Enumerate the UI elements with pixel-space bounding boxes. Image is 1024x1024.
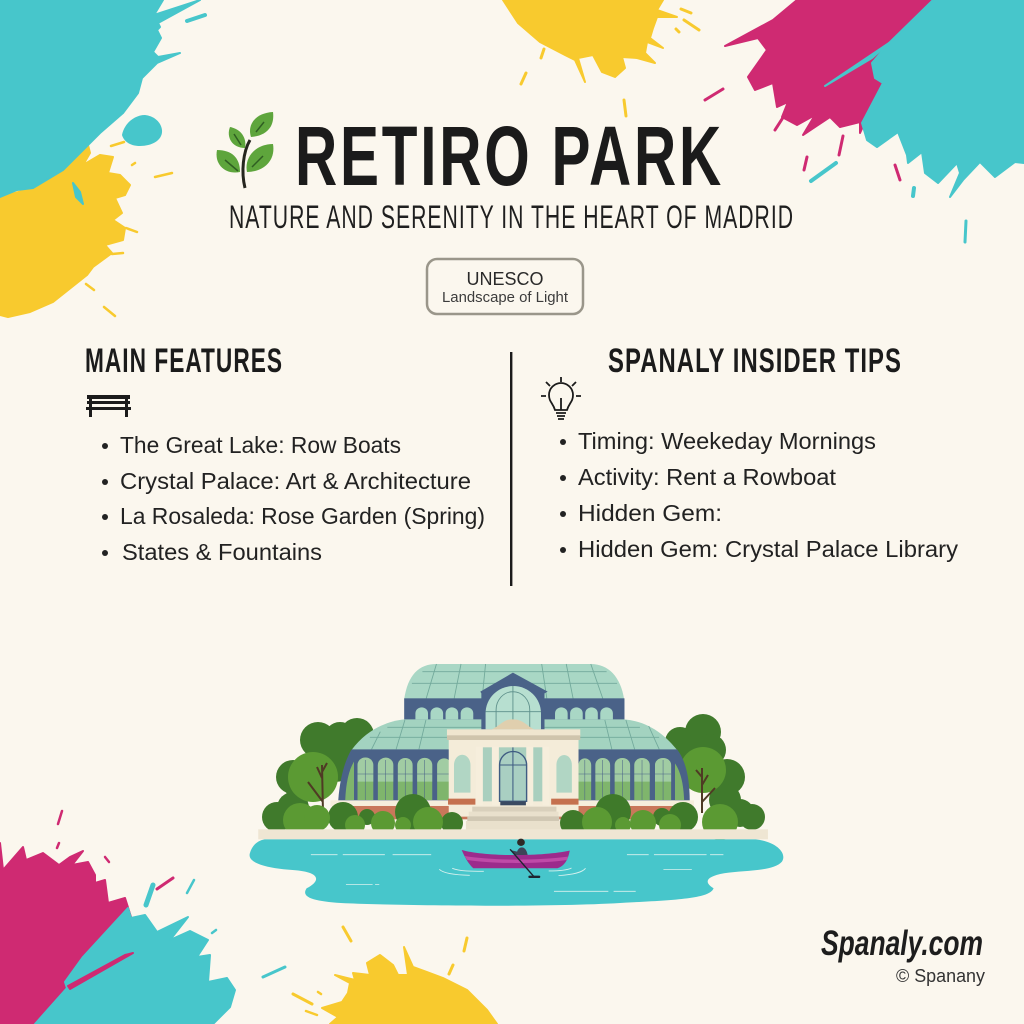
paint splash: top right magenta and teal [705, 0, 1024, 242]
tree trunks [308, 763, 715, 813]
entrance steps [466, 807, 561, 830]
palace building [331, 664, 694, 830]
trees behind the palace [262, 714, 765, 832]
portico [447, 719, 580, 817]
water ripples [311, 855, 723, 891]
lake and boat [250, 829, 783, 906]
glass hall with arches [338, 749, 690, 801]
icon: park bench [86, 395, 131, 417]
plinth with brick base [331, 800, 694, 819]
badge: UNESCO: UNESCO [466, 269, 544, 289]
central gable [480, 673, 548, 729]
foreground bushes [283, 794, 738, 840]
lake [250, 839, 783, 906]
tips list: Hidden Gem: [578, 500, 722, 526]
promenade [258, 829, 768, 839]
paint splash: top yellow [503, 0, 699, 116]
illustration: crystal palace and lake [250, 664, 783, 906]
feature list [102, 432, 485, 565]
icon: light bulb [541, 377, 581, 419]
heading: insider tips: SPANALY INSIDER TIPS [608, 342, 902, 380]
title: RETIRO PARK [295, 109, 724, 203]
icon: green leaves [217, 112, 273, 188]
lower glass dome [352, 719, 677, 750]
feature list: La Rosaleda: Rose Garden (Spring) [120, 503, 485, 529]
rowboat with rower [462, 839, 570, 878]
feature list: States & Fountains [122, 539, 322, 565]
badge: UNESCO [427, 259, 583, 314]
feature list: The Great Lake: Row Boats [120, 432, 401, 458]
feature list: Crystal Palace: Art & Architecture [120, 468, 471, 494]
upper glass dome [404, 664, 624, 720]
heading: main features: MAIN FEATURES [85, 342, 283, 380]
divider [510, 352, 512, 586]
paint splash: bottom yellow [293, 927, 497, 1024]
tips list [560, 428, 959, 562]
panel: insider tips [541, 342, 959, 562]
badge: UNESCO: Landscape of Light [442, 289, 569, 306]
tips list: Activity: Rent a Rowboat [578, 464, 837, 490]
tips list: Hidden Gem: Crystal Palace Library [578, 536, 959, 562]
tips list: Timing: Weekeday Mornings [578, 428, 876, 454]
paint splash: bottom left magenta and teal [0, 811, 285, 1024]
paint splash: top left teal and yellow [0, 0, 205, 317]
copyright: © Spanany [896, 966, 985, 986]
panel: main features [85, 342, 485, 565]
